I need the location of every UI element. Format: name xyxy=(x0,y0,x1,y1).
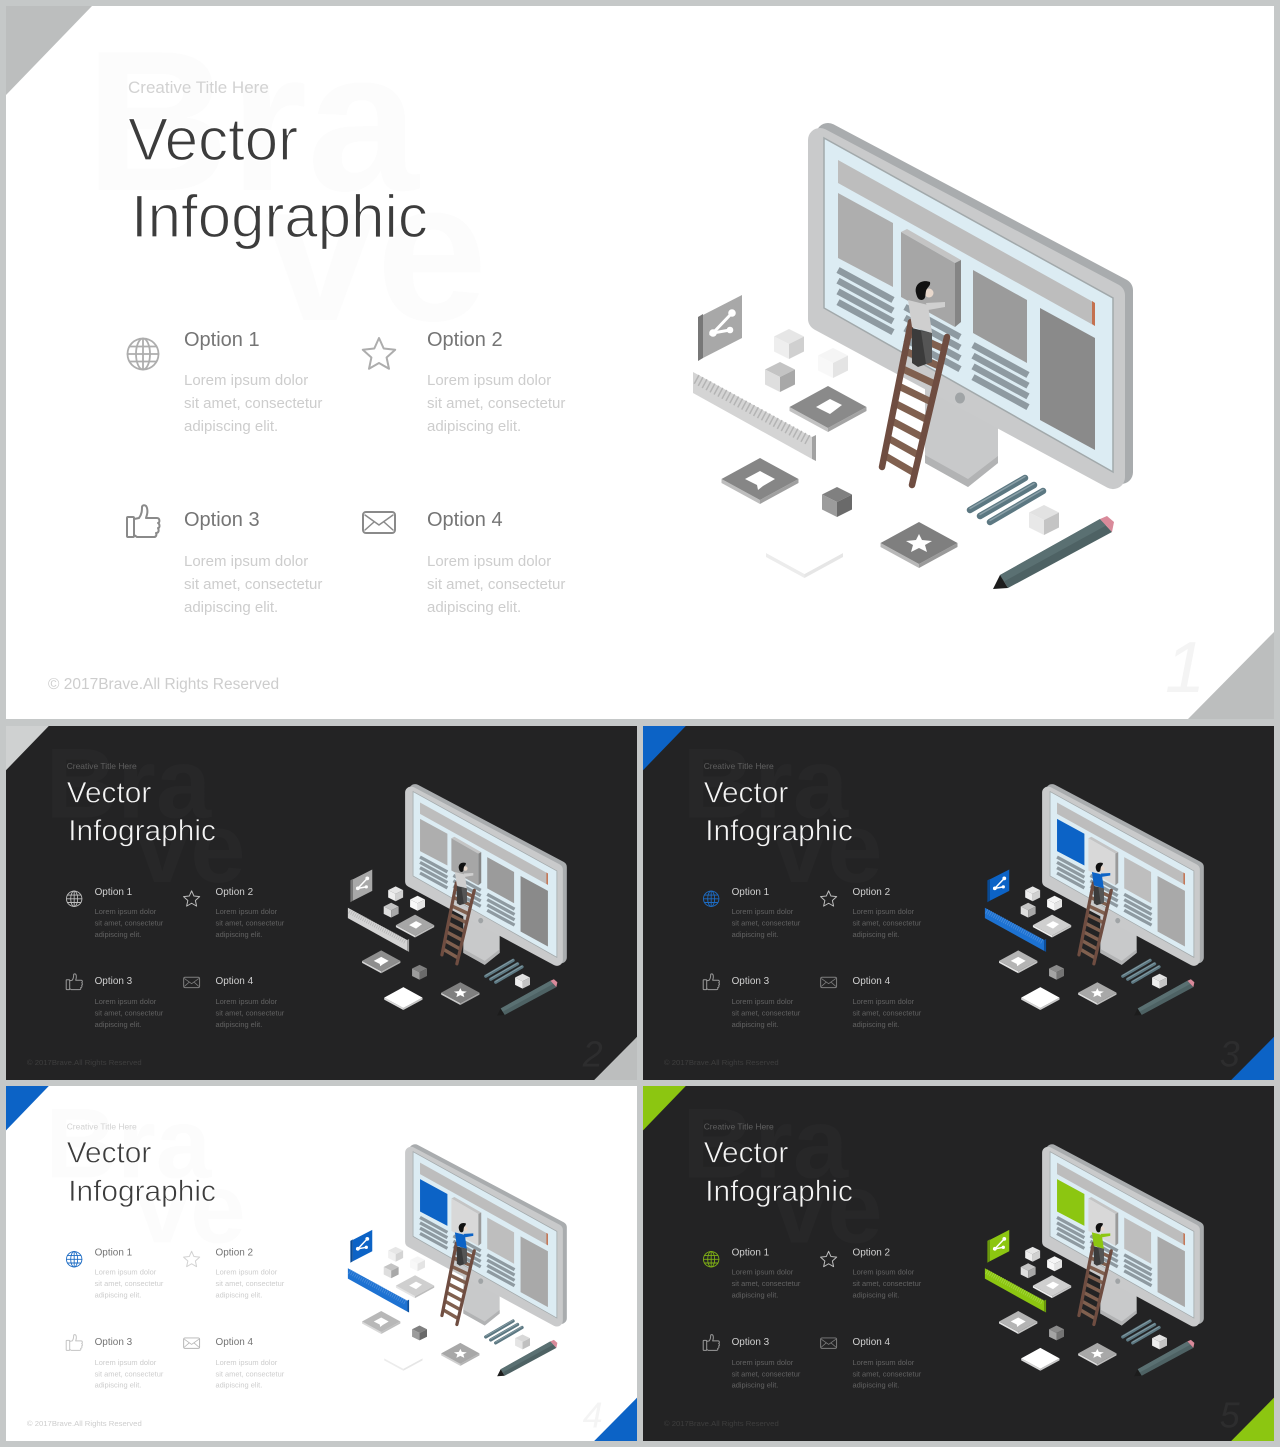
option title: Option 1 xyxy=(184,329,260,351)
cube xyxy=(822,487,852,517)
option text: adipiscing elit. xyxy=(95,930,141,939)
corner: top left xyxy=(6,1086,49,1130)
title xyxy=(704,776,853,848)
watermark: Brave: ve xyxy=(772,793,883,904)
option 3 xyxy=(703,974,801,1029)
option text: adipiscing elit. xyxy=(732,930,778,939)
tile: star xyxy=(441,1343,479,1366)
cube xyxy=(1049,965,1064,980)
person xyxy=(908,281,945,367)
option text: sit amet, consectetur xyxy=(732,1008,801,1017)
ladder xyxy=(442,883,474,964)
corner: bottom right xyxy=(594,1398,637,1441)
watermark: Brave: Bra xyxy=(682,728,849,839)
option text: Lorem ipsum dolor xyxy=(427,372,551,389)
tile: blank xyxy=(1021,987,1060,1010)
icon: envelope xyxy=(363,512,395,533)
corner: top left xyxy=(643,1086,686,1130)
eyebrow heading: Creative Title Here xyxy=(704,761,774,771)
tile: chat xyxy=(999,1311,1037,1334)
cube xyxy=(1047,1256,1062,1271)
panel: slide 2 dark grey xyxy=(6,726,637,1080)
watermark: Brave xyxy=(682,728,883,904)
icon: globe xyxy=(66,1252,82,1267)
option text: sit amet, consectetur xyxy=(853,1008,922,1017)
option text: sit amet, consectetur xyxy=(216,919,285,928)
option title: Option 3 xyxy=(732,976,770,987)
option text: Lorem ipsum dolor xyxy=(95,997,157,1006)
option text: Lorem ipsum dolor xyxy=(95,907,157,916)
title xyxy=(67,1137,216,1208)
tile: chat xyxy=(362,950,400,973)
tile: star xyxy=(880,522,958,568)
corner: top left xyxy=(6,726,49,770)
share tile xyxy=(987,869,1009,902)
cube xyxy=(1049,1325,1064,1340)
monitor xyxy=(1048,790,1198,965)
icon: envelope xyxy=(184,1338,200,1348)
watermark: Brave: Bra xyxy=(45,1089,212,1200)
option text: sit amet, consectetur xyxy=(95,919,164,928)
option title: Option 2 xyxy=(427,329,503,351)
page number: 2 xyxy=(582,1035,603,1075)
tile: star xyxy=(441,982,479,1005)
cube xyxy=(1025,1247,1040,1262)
option text: adipiscing elit. xyxy=(216,1291,262,1300)
option title: Option 1 xyxy=(732,1247,770,1258)
option text: sit amet, consectetur xyxy=(184,576,322,593)
option text: sit amet, consectetur xyxy=(427,395,565,412)
text lines xyxy=(1123,1320,1159,1343)
share tile xyxy=(350,869,372,902)
illustration: isometric monitor scene xyxy=(985,790,1198,1015)
title: Infographic xyxy=(68,1175,216,1208)
ruler xyxy=(693,372,816,461)
option text: adipiscing elit. xyxy=(732,1020,778,1029)
tile: mail xyxy=(1033,915,1071,938)
option title: Option 2 xyxy=(853,887,891,898)
pencil xyxy=(993,516,1114,589)
cube xyxy=(1152,974,1167,989)
corner: top left xyxy=(643,726,686,770)
option 1 xyxy=(66,1247,164,1300)
option title: Option 4 xyxy=(853,976,891,987)
option 3 xyxy=(127,505,322,616)
cube xyxy=(1152,1334,1167,1349)
copyright: © 2017Brave.All Rights Reserved xyxy=(48,676,279,693)
illustration: isometric monitor scene xyxy=(985,1150,1198,1376)
cube xyxy=(412,965,427,980)
option text: Lorem ipsum dolor xyxy=(853,1358,915,1367)
page number: 4 xyxy=(583,1396,603,1436)
tile: blank xyxy=(384,987,423,1010)
option 2 xyxy=(363,329,565,435)
option text: adipiscing elit. xyxy=(95,1291,141,1300)
title: Infographic xyxy=(705,815,853,848)
option text: sit amet, consectetur xyxy=(216,1008,285,1017)
option title: Option 2 xyxy=(216,887,254,898)
ruler xyxy=(985,908,1046,952)
corner: bottom right xyxy=(1231,1037,1274,1080)
option text: adipiscing elit. xyxy=(732,1291,778,1300)
option text: Lorem ipsum dolor xyxy=(732,1358,794,1367)
pencil xyxy=(497,1340,557,1376)
pencil xyxy=(497,979,557,1015)
option text: sit amet, consectetur xyxy=(216,1369,285,1378)
option text: sit amet, consectetur xyxy=(95,1369,164,1378)
option 1 xyxy=(66,887,164,939)
eyebrow heading: Creative Title Here xyxy=(67,1121,137,1131)
option text: Lorem ipsum dolor xyxy=(732,907,794,916)
option text: Lorem ipsum dolor xyxy=(216,1268,278,1277)
option title: Option 4 xyxy=(853,1337,891,1348)
option 4 xyxy=(821,1337,922,1390)
title: Vector xyxy=(67,1137,151,1170)
option text: adipiscing elit. xyxy=(184,418,278,435)
ladder xyxy=(442,1243,474,1324)
option text: sit amet, consectetur xyxy=(853,919,922,928)
cube xyxy=(1021,903,1036,918)
option title: Option 3 xyxy=(184,509,260,531)
cube xyxy=(388,886,403,901)
share tile xyxy=(350,1230,372,1263)
option title: Option 4 xyxy=(427,509,503,531)
person xyxy=(1092,863,1110,905)
cube xyxy=(1029,505,1059,535)
option text: adipiscing elit. xyxy=(853,930,899,939)
option text: adipiscing elit. xyxy=(95,1020,141,1029)
watermark: Brave: Bra xyxy=(45,728,212,839)
ladder xyxy=(882,322,947,485)
option title: Option 2 xyxy=(216,1247,254,1258)
option text: sit amet, consectetur xyxy=(853,1369,922,1378)
corner: bottom right xyxy=(594,1037,637,1080)
icon: thumbs up xyxy=(66,974,82,990)
option text: Lorem ipsum dolor xyxy=(216,907,278,916)
option 1 xyxy=(703,887,801,939)
icon: thumbs up xyxy=(703,1335,719,1350)
cube xyxy=(765,362,795,392)
icon: thumbs up xyxy=(66,1335,82,1350)
option text: adipiscing elit. xyxy=(216,1381,262,1390)
option text: sit amet, consectetur xyxy=(184,395,322,412)
title: Infographic xyxy=(131,183,428,250)
option title: Option 1 xyxy=(95,1247,133,1258)
option text: sit amet, consectetur xyxy=(95,1008,164,1017)
watermark: Brave: ve xyxy=(265,140,487,363)
copyright: © 2017Brave.All Rights Reserved xyxy=(27,1419,142,1428)
page number: 1 xyxy=(1165,628,1205,708)
pencil xyxy=(1134,979,1194,1015)
copyright: © 2017Brave.All Rights Reserved xyxy=(664,1419,779,1428)
icon: thumbs up xyxy=(703,974,719,990)
illustration: isometric monitor scene xyxy=(693,135,1121,589)
monitor xyxy=(411,1150,561,1325)
watermark: Brave xyxy=(45,1089,246,1264)
option title: Option 1 xyxy=(732,887,770,898)
person xyxy=(1092,1223,1110,1266)
title: Infographic xyxy=(705,1175,853,1208)
cube xyxy=(515,1334,530,1349)
cube xyxy=(1021,1263,1036,1278)
option text: Lorem ipsum dolor xyxy=(216,997,278,1006)
cube xyxy=(384,1263,399,1278)
icon: envelope xyxy=(184,977,200,988)
icon: globe xyxy=(66,891,82,906)
option 2 xyxy=(184,887,285,939)
page number: 3 xyxy=(1220,1035,1240,1075)
option text: adipiscing elit. xyxy=(427,418,521,435)
text lines xyxy=(486,960,522,982)
tile: chat xyxy=(722,458,798,504)
copyright: © 2017Brave.All Rights Reserved xyxy=(27,1058,142,1067)
option 2 xyxy=(821,1247,922,1300)
title: Vector xyxy=(704,776,788,809)
ruler xyxy=(985,1268,1046,1313)
watermark: Brave xyxy=(85,10,487,363)
icon: envelope xyxy=(821,1338,837,1348)
title: Vector xyxy=(128,106,298,173)
icon: star xyxy=(363,338,395,369)
cube xyxy=(515,974,530,989)
option 3 xyxy=(703,1335,801,1390)
option title: Option 4 xyxy=(216,976,254,987)
copyright: © 2017Brave.All Rights Reserved xyxy=(664,1058,779,1067)
watermark: Brave: Bra xyxy=(85,10,420,233)
title xyxy=(704,1137,853,1208)
option text: Lorem ipsum dolor xyxy=(95,1268,157,1277)
text lines xyxy=(970,476,1043,522)
option title: Option 3 xyxy=(95,976,133,987)
option title: Option 3 xyxy=(732,1337,770,1348)
option text: Lorem ipsum dolor xyxy=(853,1268,915,1277)
icon: globe xyxy=(703,1252,719,1267)
tile: mail xyxy=(790,386,866,432)
tile: mail xyxy=(1033,1275,1071,1298)
option text: Lorem ipsum dolor xyxy=(184,553,308,570)
tile: star xyxy=(1078,1343,1116,1366)
option text: Lorem ipsum dolor xyxy=(95,1358,157,1367)
cube xyxy=(412,1325,427,1340)
option text: adipiscing elit. xyxy=(216,1020,262,1029)
title: Infographic xyxy=(68,815,216,848)
cube xyxy=(388,1247,403,1262)
option text: adipiscing elit. xyxy=(216,930,262,939)
pencil xyxy=(1134,1340,1194,1376)
option 4 xyxy=(363,509,565,616)
watermark: Brave: ve xyxy=(135,793,246,904)
eyebrow heading: Creative Title Here xyxy=(128,78,269,97)
watermark: Brave: ve xyxy=(772,1153,883,1264)
corner: bottom right xyxy=(1188,632,1274,719)
watermark: Brave xyxy=(682,1089,883,1264)
tile: star xyxy=(1078,982,1116,1005)
cube xyxy=(410,1256,425,1271)
icon: star xyxy=(184,891,200,906)
option text: sit amet, consectetur xyxy=(853,1279,922,1288)
icon: envelope xyxy=(821,977,837,988)
corner: top left xyxy=(6,6,92,95)
option 2 xyxy=(821,887,922,939)
option 1 xyxy=(128,329,322,435)
tile: mail xyxy=(396,915,434,938)
option text: Lorem ipsum dolor xyxy=(184,372,308,389)
ladder xyxy=(1079,1243,1111,1324)
option text: adipiscing elit. xyxy=(427,599,521,616)
cube xyxy=(818,348,848,378)
option text: Lorem ipsum dolor xyxy=(427,553,551,570)
option 4 xyxy=(821,976,922,1029)
ruler xyxy=(348,1268,409,1313)
eyebrow heading: Creative Title Here xyxy=(67,761,137,771)
watermark: Brave: Bra xyxy=(682,1089,849,1200)
panel: slide 4 light blue xyxy=(6,1086,637,1441)
option text: sit amet, consectetur xyxy=(216,1279,285,1288)
title xyxy=(128,106,428,250)
option text: adipiscing elit. xyxy=(184,599,278,616)
icon: globe xyxy=(703,891,719,906)
option text: sit amet, consectetur xyxy=(732,1279,801,1288)
option title: Option 4 xyxy=(216,1337,254,1348)
option 3 xyxy=(66,974,164,1029)
watermark: Brave: ve xyxy=(135,1153,246,1264)
text lines xyxy=(486,1320,522,1343)
option 1 xyxy=(703,1247,801,1300)
option 2 xyxy=(184,1247,285,1300)
ladder xyxy=(1079,883,1111,964)
option text: sit amet, consectetur xyxy=(427,576,565,593)
icon: star xyxy=(184,1251,200,1267)
monitor xyxy=(411,790,561,965)
option text: sit amet, consectetur xyxy=(732,919,801,928)
monitor xyxy=(820,135,1121,487)
option text: Lorem ipsum dolor xyxy=(853,997,915,1006)
option text: adipiscing elit. xyxy=(853,1381,899,1390)
tile: chat xyxy=(999,950,1037,973)
ruler xyxy=(348,908,409,952)
person xyxy=(455,1223,473,1266)
option 3 xyxy=(66,1335,164,1390)
tile: mail xyxy=(396,1275,434,1298)
panel: slide 1 large light grey xyxy=(6,6,1274,719)
option title: Option 3 xyxy=(95,1337,133,1348)
option title: Option 2 xyxy=(853,1247,891,1258)
title xyxy=(67,776,216,848)
tile: chat xyxy=(362,1311,400,1334)
option text: adipiscing elit. xyxy=(95,1381,141,1390)
page number: 5 xyxy=(1220,1396,1241,1436)
monitor xyxy=(1048,1150,1198,1325)
cube xyxy=(1047,896,1062,911)
share tile xyxy=(698,295,742,361)
tile: blank xyxy=(384,1348,423,1371)
share tile xyxy=(987,1230,1009,1263)
option text: Lorem ipsum dolor xyxy=(732,997,794,1006)
option text: sit amet, consectetur xyxy=(732,1369,801,1378)
person xyxy=(455,863,473,905)
option text: adipiscing elit. xyxy=(853,1020,899,1029)
illustration: isometric monitor scene xyxy=(348,790,561,1015)
option text: adipiscing elit. xyxy=(732,1381,778,1390)
cube xyxy=(774,329,804,359)
option text: Lorem ipsum dolor xyxy=(216,1358,278,1367)
option 4 xyxy=(184,1337,285,1390)
cube xyxy=(384,903,399,918)
cube xyxy=(410,896,425,911)
icon: star xyxy=(821,1251,837,1267)
option title: Option 1 xyxy=(95,887,133,898)
eyebrow heading: Creative Title Here xyxy=(704,1121,774,1131)
icon: thumbs up xyxy=(127,505,160,537)
option text: sit amet, consectetur xyxy=(95,1279,164,1288)
option 4 xyxy=(184,976,285,1029)
title: Vector xyxy=(704,1137,788,1170)
option text: Lorem ipsum dolor xyxy=(853,907,915,916)
text lines xyxy=(1123,960,1159,982)
corner: bottom right xyxy=(1231,1398,1274,1441)
illustration: isometric monitor scene xyxy=(348,1150,561,1376)
option text: Lorem ipsum dolor xyxy=(732,1268,794,1277)
icon: globe xyxy=(128,338,158,370)
watermark: Brave xyxy=(45,728,246,904)
title: Vector xyxy=(67,776,151,809)
option text: adipiscing elit. xyxy=(853,1291,899,1300)
tile: blank xyxy=(1021,1348,1060,1371)
panel: slide 3 dark blue xyxy=(643,726,1274,1080)
cube xyxy=(1025,886,1040,901)
icon: star xyxy=(821,891,837,906)
tile: blank xyxy=(766,532,843,578)
panel: slide 5 dark green xyxy=(643,1086,1274,1441)
